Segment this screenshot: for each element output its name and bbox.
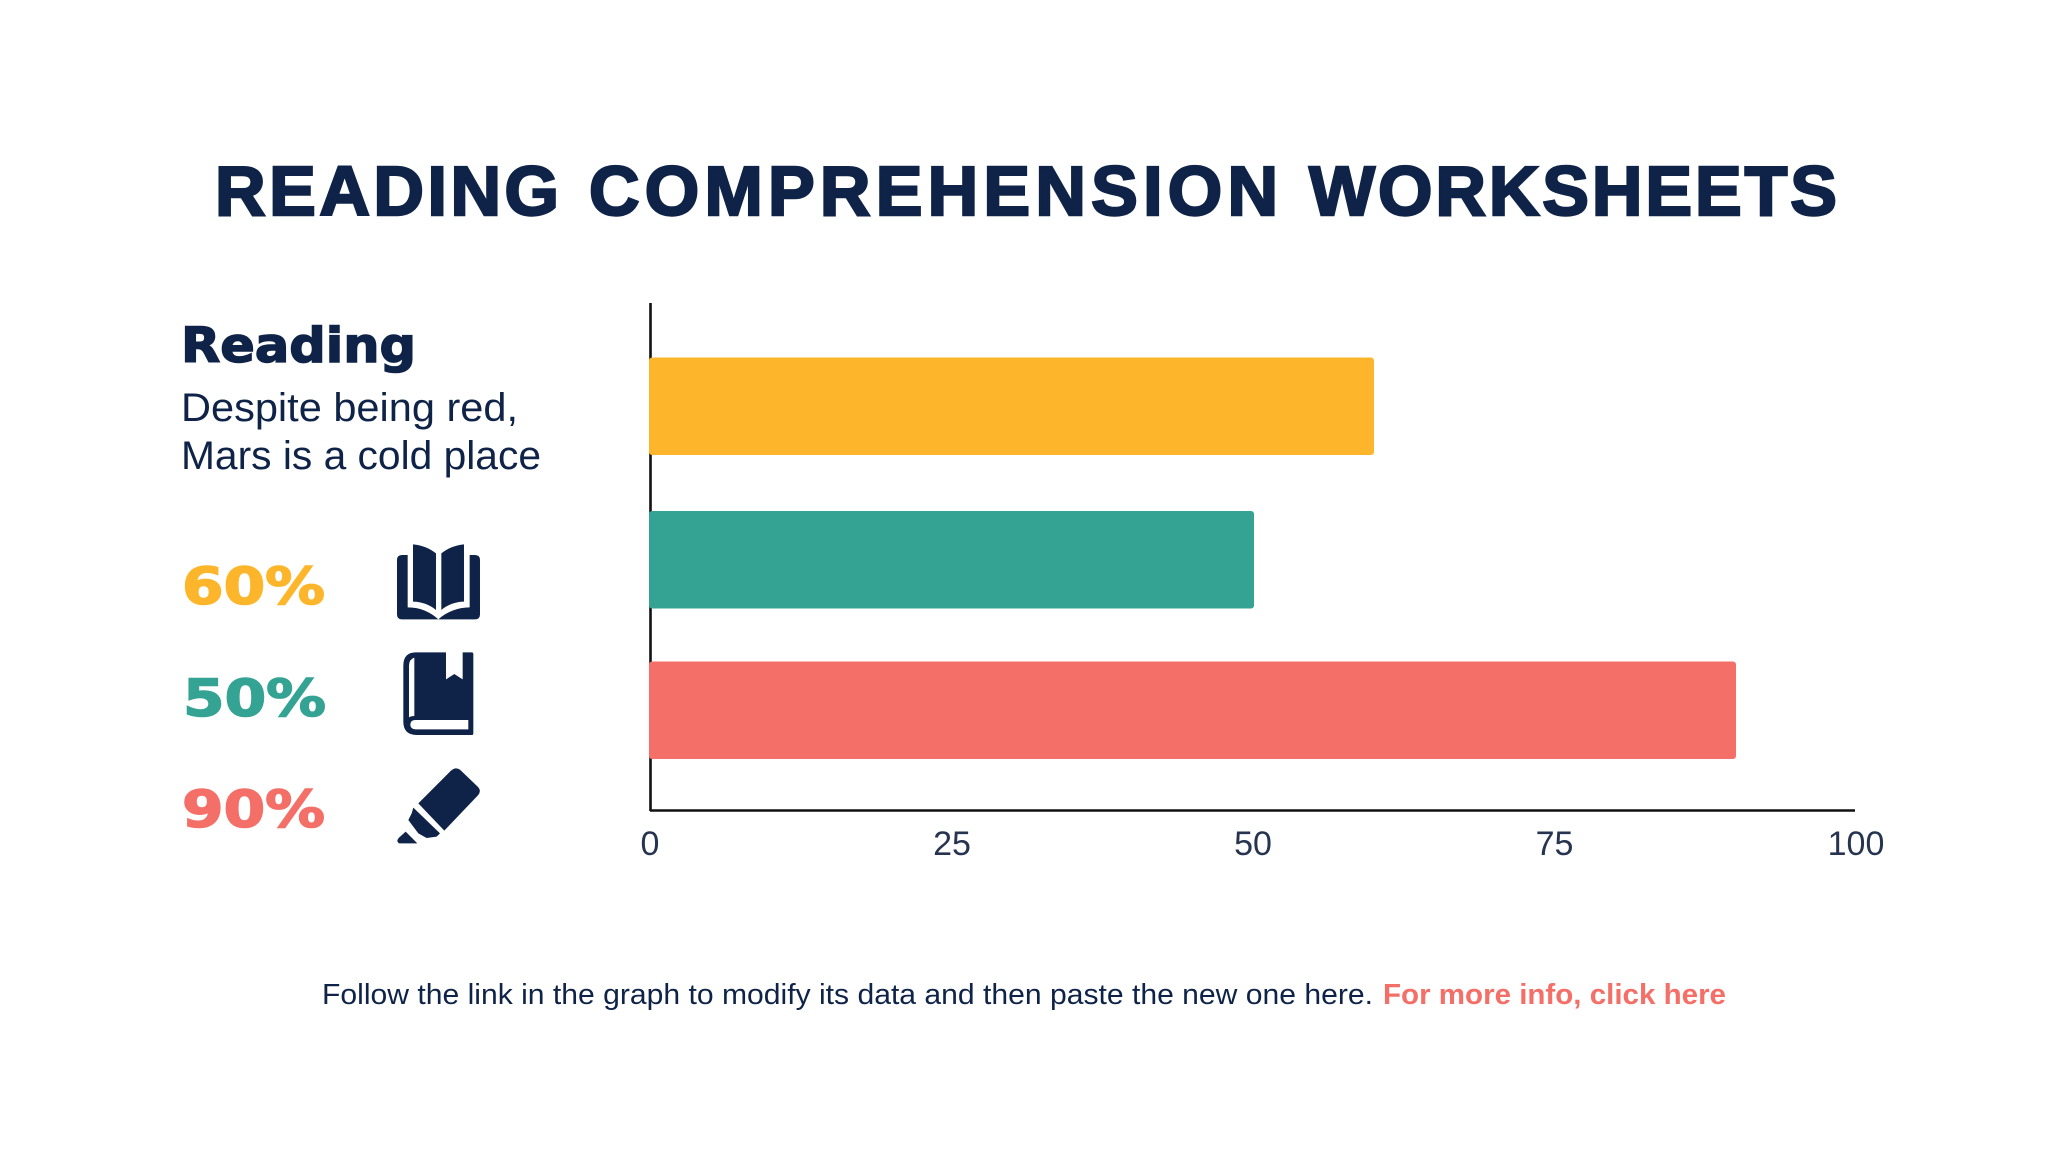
stat: 60%: 60% — [182, 558, 325, 617]
axis tick labels: 75 — [1536, 825, 1573, 863]
axis lines — [650, 303, 1855, 811]
bar chart — [641, 303, 1884, 863]
bar: 90 — [649, 662, 1736, 759]
title: READING — [215, 152, 559, 230]
axis tick labels: 100 — [1828, 825, 1884, 863]
icon: closed book — [403, 652, 473, 735]
icon: highlighter — [397, 768, 480, 843]
text block: description: Mars is a cold place — [181, 434, 541, 478]
icon: open book — [397, 544, 480, 619]
footer note: Follow the link in the graph to modify its data and then paste the new one here. — [322, 979, 1373, 1011]
stat: 50%: 50% — [183, 670, 326, 729]
title — [215, 152, 1837, 230]
bar: 60 — [649, 358, 1374, 455]
axis tick labels — [641, 825, 1884, 863]
stat: 90%: 90% — [182, 781, 325, 840]
bar: 50 — [649, 511, 1254, 608]
axis tick labels: 0 — [641, 825, 659, 863]
axis tick labels: 50 — [1234, 825, 1272, 863]
axis tick labels: 25 — [933, 825, 971, 863]
text block: description: Despite being red, — [181, 386, 518, 430]
heading: Reading: Reading — [181, 318, 416, 374]
text block: description — [181, 386, 541, 478]
title: COMPREHENSION — [589, 152, 1278, 230]
title: WORKSHEETS — [1309, 152, 1837, 230]
footer note: For more info, click here — [1383, 979, 1726, 1011]
panel: reading summary — [181, 318, 541, 478]
